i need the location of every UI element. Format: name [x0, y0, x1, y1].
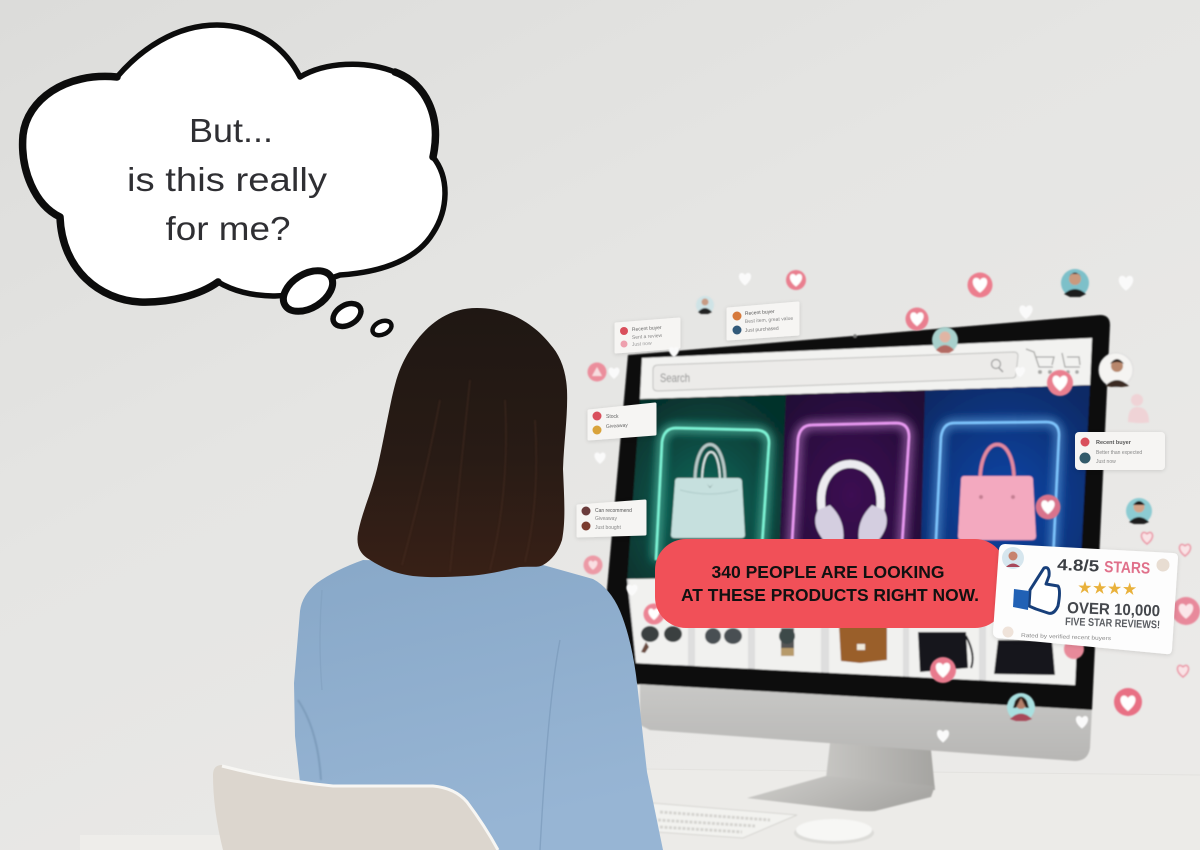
star reviewer avatar [1156, 558, 1170, 572]
bubble text [127, 112, 328, 247]
thought dots [276, 262, 394, 338]
hair strands [402, 380, 536, 572]
card 5 [1075, 432, 1165, 470]
card 1: Recent buyer [632, 325, 662, 333]
webcam [853, 334, 857, 338]
card 5: Better than expected [1096, 450, 1142, 456]
rating card [993, 544, 1178, 654]
monitor silver chin [640, 684, 1092, 761]
thumbnail: black bag [918, 632, 973, 672]
rating headline: 4.8/5 [1057, 557, 1100, 575]
callout: live viewers: AT THESE PRODUCTS RIGHT NOW. [681, 585, 979, 605]
card 2: Best item, great value [745, 316, 794, 325]
review count: OVER 10,000 [1067, 600, 1160, 620]
office chair [213, 765, 498, 850]
desk [80, 769, 1200, 850]
pale pink figure [1128, 394, 1149, 423]
neon frame: purple [791, 423, 909, 560]
card 2: Recent buyer [745, 309, 775, 317]
thumbnail: black bag 2 [994, 640, 1055, 675]
product: mint handbag [671, 444, 745, 538]
mouse [794, 819, 874, 844]
computer monitor [606, 315, 1110, 811]
neon frame: blue [935, 422, 1059, 560]
card 5: Recent buyer [1096, 440, 1132, 446]
product: pink handbag [958, 444, 1036, 540]
bubble text: for me? [166, 210, 290, 247]
thumbnail: sunglasses [641, 626, 682, 653]
thumbnail: brown bag [839, 626, 887, 663]
card 4 [578, 501, 645, 536]
search bar: Search [660, 371, 690, 385]
avatar 5 [1126, 498, 1152, 524]
reviewer avatar [1002, 547, 1024, 569]
small reviewer row: Rated by verified recent buyers [1021, 633, 1111, 642]
card 1: Sent a review [632, 333, 663, 341]
avatar 4 [1099, 353, 1133, 387]
monitor stand [747, 743, 935, 811]
avatar 1 [696, 296, 714, 314]
card 4: Can recommend [595, 508, 632, 514]
blue sweater [294, 560, 663, 850]
card 1 [616, 319, 679, 352]
cloud outline [23, 25, 445, 302]
browser header [640, 338, 1092, 399]
bubble text: is this really [127, 161, 328, 198]
hair [357, 308, 567, 577]
neon frame: green [656, 428, 769, 560]
thought bubble [23, 25, 445, 338]
rating headline: STARS [1104, 559, 1151, 578]
card 4: Giveaway [595, 516, 617, 522]
card 3: Stock [606, 414, 619, 420]
bubble text: But... [189, 112, 273, 149]
floating user avatars [696, 269, 1152, 721]
card 1: Just now [632, 341, 652, 348]
monitor black bezel [606, 315, 1110, 710]
product thumbnail strip [626, 577, 1078, 686]
card 3 [589, 404, 655, 439]
rating headline [1057, 557, 1151, 578]
woman seen from behind [294, 308, 663, 850]
floating pink heart badges [584, 270, 1200, 716]
thumbnail: sunglasses 2 [705, 628, 742, 644]
card 3: Giveaway [606, 422, 629, 430]
floating white hearts [594, 273, 1133, 743]
keyboard [652, 803, 797, 838]
card 4: Just bought [595, 525, 621, 531]
product: headphones [815, 464, 887, 542]
neon product panels [627, 385, 1090, 582]
callout: live viewers [655, 539, 1006, 628]
icon: carts [1026, 349, 1080, 373]
review caption: FIVE STAR REVIEWS! [1065, 616, 1160, 631]
avatar 3 [932, 327, 958, 353]
small reviewer row [1002, 626, 1111, 642]
card 2 [728, 303, 798, 339]
callout: live viewers: 340 PEOPLE ARE LOOKING [712, 562, 944, 582]
avatar 2 [1061, 269, 1089, 297]
search bar [653, 352, 1018, 391]
icon: thumbs up [1013, 568, 1060, 613]
floating social notification cards [578, 303, 1165, 536]
card 2: Just purchased [745, 326, 779, 334]
star row: ★★★★ [1077, 578, 1137, 599]
thumbnail: watch [779, 628, 795, 656]
card 5: Just now [1096, 459, 1116, 465]
sketch stroke accents [23, 72, 435, 302]
avatar 6 [1007, 693, 1035, 721]
